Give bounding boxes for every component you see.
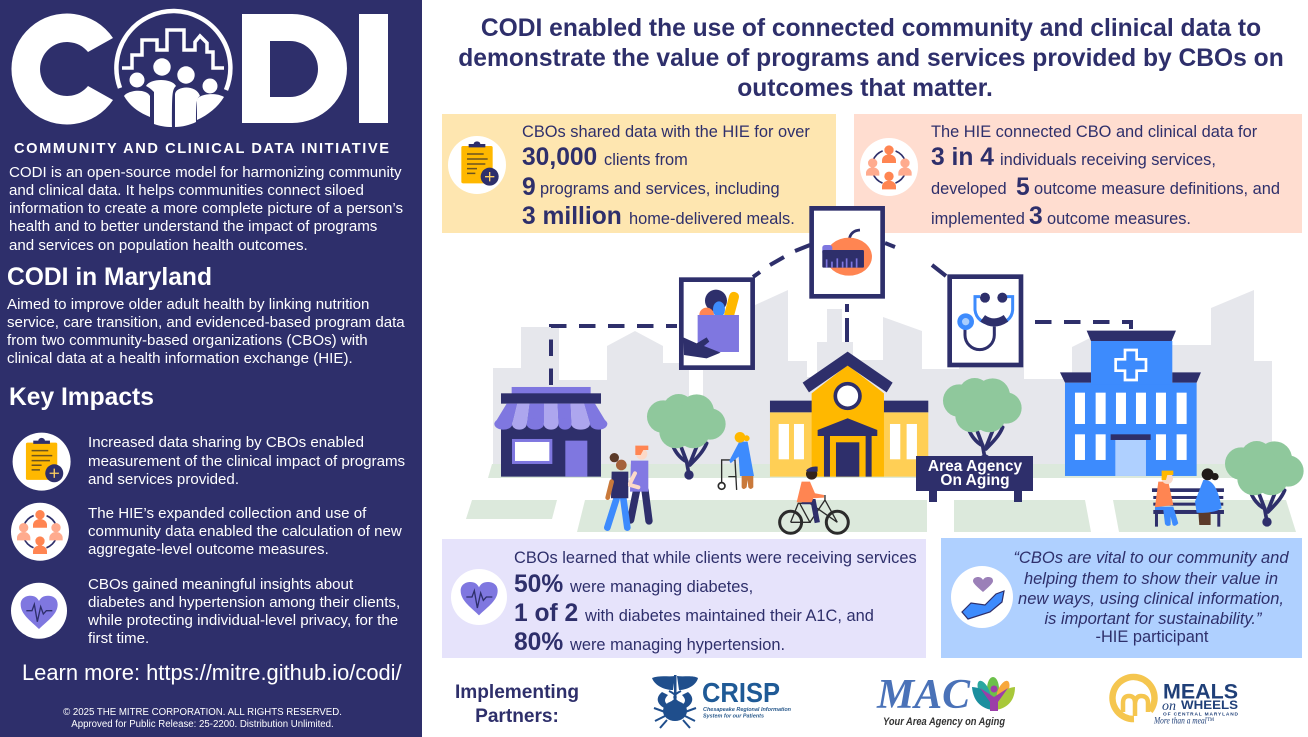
copyright [63,707,342,730]
Maryland description: from two community-based organizations (CBOs) with [7,332,368,349]
impact 3 text: CBOs gained meaningful insights about [88,576,354,593]
stat text: CBOs learned that while clients were receiving services [514,549,917,567]
quote text: new ways, using clinical information, [1018,590,1284,608]
copyright: Approved for Public Release: 25-2200. Distribution Unlimited. [71,719,334,730]
impact 2 text: community data enabled the calculation of new [88,523,402,540]
building: community center [770,352,928,477]
intro text: CODI is an open-source model for harmonizing community [9,164,402,181]
panel: data sharing stats [442,114,836,233]
panel: participant quote [941,538,1302,658]
panel: health outcomes [442,539,926,658]
stat text: clients from [604,151,688,169]
ground paths [466,464,1296,532]
impact 2 text: aggregate-level outcome measures. [88,541,329,558]
Maryland description: service, care transition, and evidenced-based program data [7,314,405,331]
icon: heart pulse [451,569,507,625]
logo: CRISP: Chesapeake Regional Information [703,707,792,713]
Maryland description: Aimed to improve older adult health by linking nutrition [7,296,369,313]
sign: Area Agency On Aging [916,456,1033,502]
impact 3 text: diabetes and hypertension among their clients, [88,594,400,611]
title: CODI enabled the use of connected community and clinical data to [481,15,1261,42]
icon: connected people [11,503,69,561]
tree [647,394,726,480]
intro text [9,164,403,254]
stat text: developed [931,180,1007,198]
logo: MAC [876,672,1015,728]
quote text: “CBOs are vital to our community and [1013,549,1289,567]
quote text: -HIE participant [1096,628,1209,646]
logo: Meals on Wheels: WHEELS [1181,698,1238,712]
logo subtitle: COMMUNITY AND CLINICAL DATA INITIATIVE [14,141,389,157]
heading: CODI in Maryland: CODI in Maryland [7,264,212,291]
quote text [1013,549,1289,646]
icon: clipboard [13,433,71,491]
learn more link: Learn more: https://mitre.github.io/codi/ [22,660,403,685]
stat text: 3 in 4 [931,144,994,171]
CODI logo [11,11,388,127]
stat text: 50% [514,571,563,598]
impact 3 text: first time. [88,630,149,647]
stat text: individuals receiving services, [1000,151,1216,169]
icon: clipboard [448,136,506,194]
logo: Meals on Wheels [1113,677,1239,726]
heading: implementing partners [455,682,579,727]
tree [943,378,1022,464]
stat text: 1 of 2 [514,600,578,627]
impact 2 text: The HIE’s expanded collection and use of [88,505,367,522]
tree [1225,441,1304,527]
stat text: implemented [931,210,1025,228]
impact 1 text: Increased data sharing by CBOs enabled [88,434,364,451]
heading: Key Impacts: Key Impacts [9,384,154,411]
stat text: 5 [1016,174,1030,201]
stat text [931,123,1280,230]
logo: CRISP: System for our Patients [703,714,764,720]
icon: hand holding heart [951,566,1013,628]
panel: left sidebar [0,0,422,737]
stat text: were managing diabetes, [569,578,753,596]
skyline [493,290,1272,464]
heading: implementing partners: Partners: [475,706,559,727]
panel: connected data stats [854,114,1302,233]
Maryland description [7,296,405,367]
stat text [514,549,917,656]
logo: Meals on Wheels: More than a meal™ [1153,716,1214,726]
logo: CRISP [652,675,792,728]
stat text: CBOs shared data with the HIE for over [522,123,810,141]
Maryland description: clinical data at a health information exchange (HIE). [7,350,353,367]
logo: MAC: MAC [876,672,971,718]
icon box: stethoscope [950,277,1021,365]
icon box: grocery delivery [681,280,753,368]
stat text: outcome measure definitions, and [1034,180,1280,198]
stat text [522,123,810,230]
impact 3 text: while protecting individual-level privacy, for the [87,612,398,629]
intro text: and clinical data. It helps communities connect siloed [9,182,364,199]
intro text: health and to better understand the impact of programs [9,218,377,235]
title: demonstrate the value of programs and services provided by CBOs on [458,45,1284,72]
stat text: with diabetes maintained their A1C, and [584,607,874,625]
impact 1 text: and services provided. [88,471,239,488]
impact 2 text [88,505,402,558]
logo: Meals on Wheels: on [1162,699,1176,714]
stat text: 30,000 [522,144,597,171]
logo: MAC: Your Area Agency on Aging [883,716,1005,728]
quote text: helping them to show their value in [1024,570,1278,588]
quote text: is important for sustainability.” [1044,610,1263,628]
stat text: were managing hypertension. [569,636,785,654]
logo: Meals on Wheels: OF CENTRAL MARYLAND [1163,712,1239,718]
dashed connectors [551,243,1131,385]
stat text: 3 million [522,203,622,230]
sign: Area Agency On Aging: On Aging [940,472,1010,489]
stat text: 3 [1029,203,1043,230]
person cycling [780,467,848,533]
stat text: programs and services, including [540,180,780,198]
title [458,15,1284,102]
stat text: 80% [514,629,563,656]
stat text: home-delivered meals. [629,210,795,228]
impact 1 text [88,434,405,488]
stat text: outcome measures. [1047,210,1191,228]
stat text: The HIE connected CBO and clinical data for [931,123,1258,141]
logo: CRISP: CRISP [702,677,780,708]
people on bench [1152,468,1224,527]
person with walker [718,432,754,490]
heading: implementing partners: Implementing [455,682,579,703]
impact 1 text: measurement of the clinical impact of programs [88,453,405,470]
impact 3 text [87,576,400,647]
icon: connected people [860,138,918,196]
stat text: 9 [522,174,536,201]
building: hospital [1060,331,1201,476]
icon: heart pulse [11,583,67,639]
copyright: © 2025 THE MITRE CORPORATION. ALL RIGHTS RESERVED. [63,707,342,718]
logo: Meals on Wheels: MEALS [1163,680,1238,704]
intro text: information to create a more complete picture of a person’s [9,200,403,217]
building: store [494,387,607,477]
icon box: apple on scale [812,208,883,296]
title: outcomes that matter. [737,75,993,102]
intro text: and services on population health outcomes. [9,237,308,254]
people: couple walking [607,446,649,528]
illustration: community scene [466,208,1304,533]
sign: Area Agency On Aging: Area Agency [928,458,1022,475]
